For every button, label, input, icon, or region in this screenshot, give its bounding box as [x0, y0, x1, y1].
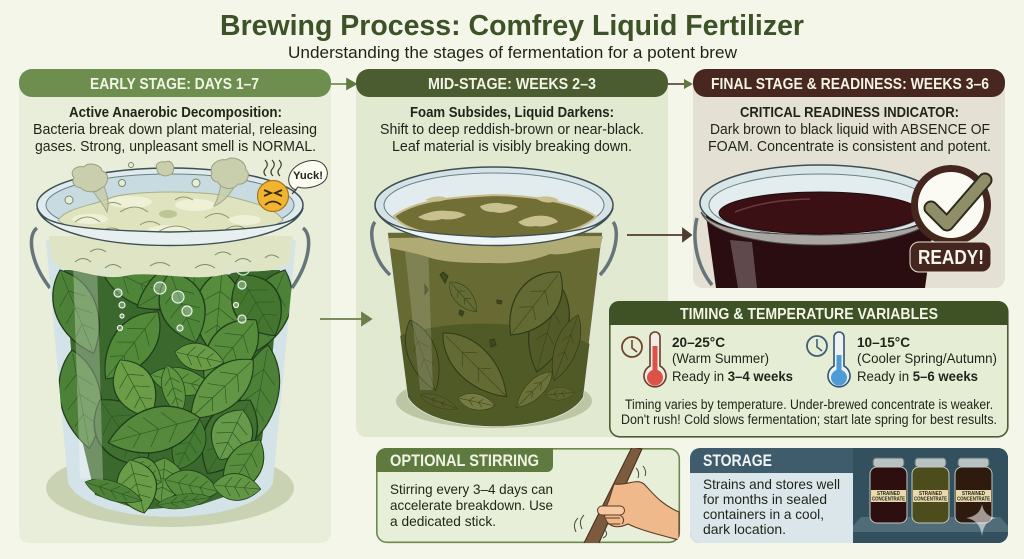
stirring text: [390, 481, 553, 529]
stirring text: accelerate breakdown. Use: [390, 497, 553, 513]
stirring text: a dedicated stick.: [390, 513, 496, 529]
mid stage header label: MID-STAGE: WEEKS 2–3: [428, 76, 596, 93]
mid stage header: [356, 69, 668, 97]
speech bubble: Yuck: [289, 161, 327, 194]
small floating bubbles: [65, 162, 200, 204]
shelf: [853, 517, 1008, 532]
icon: disgusted face: [258, 160, 288, 212]
mid stage description: Leaf material is visibly breaking down.: [392, 138, 632, 155]
jar 1: dark concentrate: STRAINED: [877, 491, 900, 497]
early stage description: [33, 104, 317, 155]
stirring heading bar: [376, 448, 553, 472]
dark rim front band: [701, 212, 939, 245]
rim front band: [37, 208, 303, 246]
subtitle: Understanding the stages of fermentation for a potent brew: [288, 43, 738, 62]
icon: red thermometer: [644, 332, 666, 387]
panel: optional stirring: [376, 447, 679, 545]
title: Brewing Process: Comfrey Liquid Fertilizer: [220, 10, 804, 42]
early stage header label: EARLY STAGE: DAYS 1–7: [90, 76, 259, 93]
cooler season details: [857, 334, 997, 384]
panel: early stage: [19, 69, 331, 543]
warm summer details: Ready in 3–4 weeks: [672, 368, 793, 384]
bucket rim: [37, 168, 303, 242]
storage text background: [690, 473, 853, 543]
glass reflection: [404, 242, 433, 390]
jar 3: brown concentrate: CONCENTRATE: [957, 496, 990, 502]
bucket with dark finished liquid: [695, 165, 940, 288]
badge: ready checkmark: [910, 165, 991, 272]
early stage description: Active Anaerobic Decomposition:: [69, 104, 282, 121]
mid stage description: Shift to deep reddish-brown or near-black.: [380, 121, 644, 138]
glass reflection: [73, 262, 103, 480]
liquid surface with foam islands: [394, 195, 596, 238]
arrowhead: mid to final: [684, 79, 693, 89]
jar 2: olive concentrate: [912, 458, 949, 523]
panel: mid stage: [356, 69, 668, 440]
bucket rim: [375, 167, 613, 243]
timing note: [621, 397, 997, 427]
icon: blue thermometer: [828, 332, 850, 387]
warm summer details: (Warm Summer): [672, 350, 769, 366]
jar 3: brown concentrate: [955, 458, 992, 523]
timing note: Timing varies by temperature. Under-brewed concentrate is weaker.: [625, 397, 993, 412]
foam surface: [58, 192, 283, 236]
cooler season details: (Cooler Spring/Autumn): [857, 350, 997, 366]
storage text: for months in sealed: [703, 491, 827, 507]
final stage header: [693, 69, 1005, 97]
panel: timing and temperature: [609, 301, 1008, 437]
rim front band: [375, 208, 613, 246]
storage heading: STORAGE: [703, 451, 772, 470]
final stage description: [708, 104, 991, 155]
timing note: Don't rush! Cold slows fermentation; start late spring for best results.: [621, 412, 997, 427]
panel: final stage: [693, 69, 1005, 288]
speech bubble: Yuck: Yuck!: [293, 170, 323, 182]
sparkle: [966, 504, 996, 536]
storage text: dark location.: [703, 521, 786, 537]
jar 2: olive concentrate: STRAINED: [919, 491, 942, 497]
jar 1: dark concentrate: CONCENTRATE: [872, 496, 905, 502]
steam puffs: [72, 158, 248, 212]
arrow: early to mid header: [331, 79, 356, 89]
timing header bar: [609, 301, 1008, 325]
cooler season details: 10–15°C: [857, 334, 910, 350]
final stage description: CRITICAL READINESS INDICATOR:: [740, 104, 959, 121]
early stage header: [19, 69, 331, 97]
shelf background: [853, 448, 1008, 543]
jar 2: olive concentrate: CONCENTRATE: [914, 496, 947, 502]
storage text: Strains and stores well: [703, 476, 840, 492]
bucket with fresh leaves and foam: [31, 158, 327, 527]
icon: clock warm: [622, 337, 642, 357]
warm summer details: 20–25°C: [672, 334, 725, 350]
mid stage description: [380, 104, 644, 155]
storage text: containers in a cool,: [703, 506, 824, 522]
bucket with darkening liquid: [372, 167, 616, 440]
final stage description: Dark brown to black liquid with ABSENCE OF: [710, 121, 990, 138]
cooler season details: Ready in 5–6 weeks: [857, 368, 978, 384]
early stage description: gases. Strong, unpleasant smell is NORMAL.: [35, 138, 316, 155]
icon: clock cool: [807, 336, 827, 356]
panel: storage: [690, 448, 1008, 543]
timing header label: TIMING & TEMPERATURE VARIABLES: [680, 306, 938, 323]
early stage description: Bacteria break down plant material, releasing: [33, 121, 317, 138]
scum line: [388, 236, 603, 263]
jar 3: brown concentrate: STRAINED: [962, 491, 985, 497]
jar 1: dark concentrate: [870, 458, 907, 523]
rising bubbles: [114, 281, 246, 331]
final stage header label: FINAL STAGE & READINESS: WEEKS 3–6: [711, 76, 989, 93]
storage text: [703, 476, 840, 537]
final stage description: FOAM. Concentrate is consistent and potent.: [708, 138, 991, 155]
foam band inside bucket: [49, 236, 293, 277]
arrow: mid to final header: [668, 83, 689, 85]
badge: ready checkmark: READY!: [918, 247, 984, 269]
arrow: mid bucket to final bucket: [627, 229, 691, 241]
arrow: early bucket to mid bucket: [320, 313, 371, 325]
stirring heading: OPTIONAL STIRRING: [390, 451, 539, 470]
warm summer details: [672, 334, 793, 384]
illustration: hand stirring with stick: [574, 447, 679, 545]
mid stage description: Foam Subsides, Liquid Darkens:: [410, 104, 614, 121]
stirring text: Stirring every 3–4 days can: [390, 481, 553, 497]
